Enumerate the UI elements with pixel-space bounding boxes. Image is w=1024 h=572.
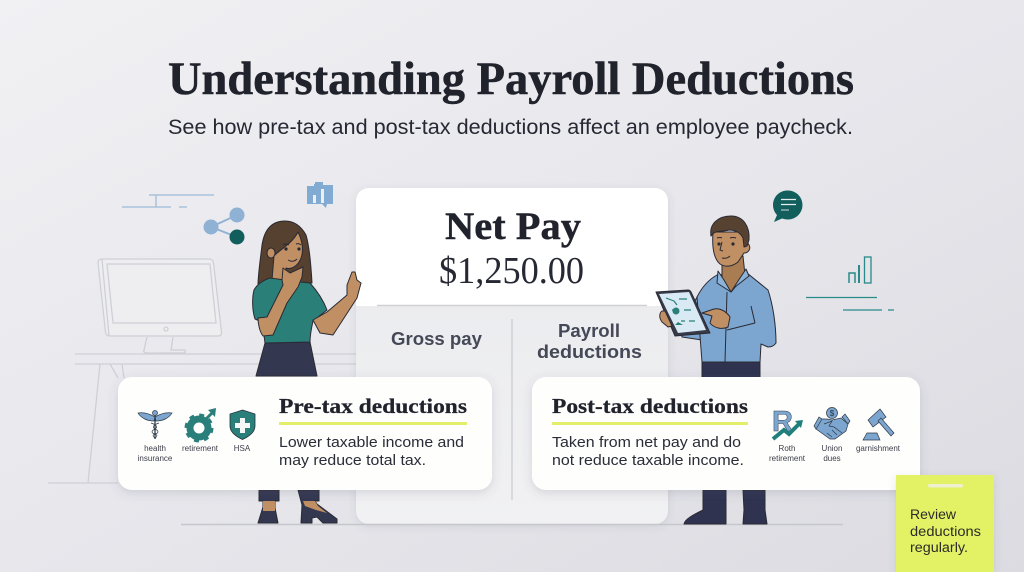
hand pointing — [702, 309, 730, 328]
note text: regularly. — [910, 540, 968, 555]
icon: retirement gear — [187, 408, 216, 440]
underline — [279, 422, 467, 425]
description: Lower taxable income and — [279, 435, 464, 451]
placket and sleeve seams — [725, 292, 755, 362]
title: Understanding Payroll Deductions — [168, 53, 854, 105]
raised arm — [313, 272, 361, 335]
neck and face — [272, 232, 302, 280]
dollar sign: $ — [830, 409, 835, 418]
panel: pre-tax deductions — [118, 377, 492, 490]
head — [713, 232, 750, 266]
ear — [267, 248, 275, 258]
icon: Roth retirement: R — [772, 406, 793, 438]
hand holding tablet — [660, 311, 672, 327]
description: not reduce taxable income. — [552, 453, 744, 469]
icon: HSA shield — [230, 410, 255, 440]
panel: net pay card — [356, 188, 668, 524]
icon: union dues handshake — [814, 408, 850, 439]
arm to chin — [258, 267, 303, 336]
icon: share nodes — [204, 208, 244, 244]
icon labels: garnishment — [856, 444, 901, 453]
heading: net pay: Net Pay — [445, 205, 582, 248]
icon: bar chart with lines — [806, 257, 894, 310]
man character — [656, 216, 776, 524]
background illustration: desk and monitor — [48, 259, 356, 483]
shirt — [697, 273, 776, 362]
hair — [711, 216, 749, 247]
label: gross pay: Gross pay — [391, 329, 482, 349]
decorative lines top left — [122, 195, 214, 207]
collar — [717, 269, 749, 292]
description: may reduce total tax. — [279, 453, 426, 469]
shirt — [253, 278, 327, 343]
left ankle — [263, 501, 275, 511]
neck and face — [722, 256, 745, 292]
label: payroll deductions: Payroll — [558, 321, 620, 341]
icon labels: insurance — [138, 454, 173, 463]
hair — [258, 221, 312, 285]
woman character — [253, 221, 361, 523]
heading: pre-tax deductions: Pre-tax deductions — [279, 394, 467, 418]
heading: post-tax deductions: Post-tax deductions — [552, 394, 748, 418]
description: Taken from net pay and do — [552, 435, 741, 451]
note text: deductions — [910, 524, 981, 539]
icon: health insurance caduceus — [138, 410, 172, 439]
panel: post-tax deductions — [532, 377, 920, 490]
left leg lower — [684, 490, 726, 524]
icon labels: retirement — [769, 454, 806, 463]
icon labels: dues — [823, 454, 841, 463]
icon labels: retirement — [182, 444, 219, 453]
right ankle — [303, 501, 327, 513]
icon: Roth retirement — [772, 406, 803, 439]
note clip — [928, 484, 963, 488]
face details — [717, 238, 736, 258]
floor line — [181, 524, 843, 526]
icon labels: HSA — [234, 444, 251, 453]
left leg lower — [258, 490, 279, 523]
right leg lower — [298, 490, 337, 523]
underline — [552, 422, 748, 425]
tablet — [656, 290, 710, 336]
subtitle: See how pre-tax and post-tax deductions affect an employee paycheck. — [168, 116, 853, 139]
icon: chat bubble — [773, 190, 802, 222]
left sleeve — [680, 297, 710, 340]
divider — [377, 304, 647, 306]
icon: chart speech bubble — [307, 182, 333, 208]
icon labels: Roth — [779, 444, 795, 453]
icon labels: Union — [822, 444, 842, 453]
column divider — [511, 319, 513, 500]
label: payroll deductions: deductions — [537, 342, 642, 362]
note text: Review — [910, 507, 956, 522]
net pay top panel — [356, 188, 668, 306]
face details — [283, 244, 301, 261]
net pay amount: $1,250.00 — [439, 250, 584, 292]
icon labels: health — [144, 444, 166, 453]
sticky note — [896, 475, 994, 572]
icon: garnishment gavel — [863, 409, 894, 440]
pants upper — [702, 361, 760, 378]
icon labels — [769, 444, 901, 463]
pants upper — [256, 342, 317, 376]
right leg lower — [743, 490, 767, 524]
icon labels — [138, 444, 251, 463]
